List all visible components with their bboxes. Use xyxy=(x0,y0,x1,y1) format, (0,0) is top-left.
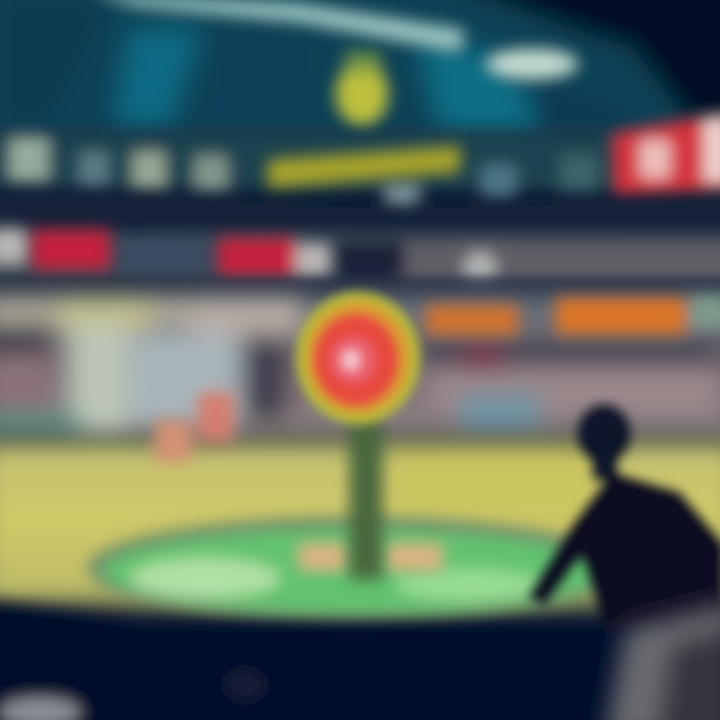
lower crowd stand xyxy=(0,292,720,437)
upper stand with pale squares xyxy=(0,132,720,213)
orange patches on pitch xyxy=(298,543,443,571)
green circular pitch xyxy=(87,516,623,620)
target centre xyxy=(314,314,398,406)
yellow emblem at top xyxy=(336,52,388,126)
red figures on the field xyxy=(155,392,234,462)
target pole xyxy=(349,420,383,580)
dark tier band xyxy=(0,188,720,245)
roof and sky xyxy=(0,0,720,140)
pitch rim xyxy=(87,516,623,620)
red signs xyxy=(32,230,330,276)
yellow field xyxy=(0,442,720,605)
yellow banner xyxy=(268,146,460,188)
target board xyxy=(296,292,420,424)
person legs xyxy=(605,605,720,720)
target outer ring xyxy=(296,292,420,424)
pitch surface xyxy=(103,529,607,613)
middle tier with red signs xyxy=(0,228,720,284)
dark rail xyxy=(0,278,720,290)
person head and torso xyxy=(528,404,720,630)
person silhouette xyxy=(528,404,720,720)
dark foreground xyxy=(0,600,720,720)
white roof arc xyxy=(90,0,578,79)
red and white sign xyxy=(612,114,720,196)
orange signs xyxy=(426,296,720,335)
